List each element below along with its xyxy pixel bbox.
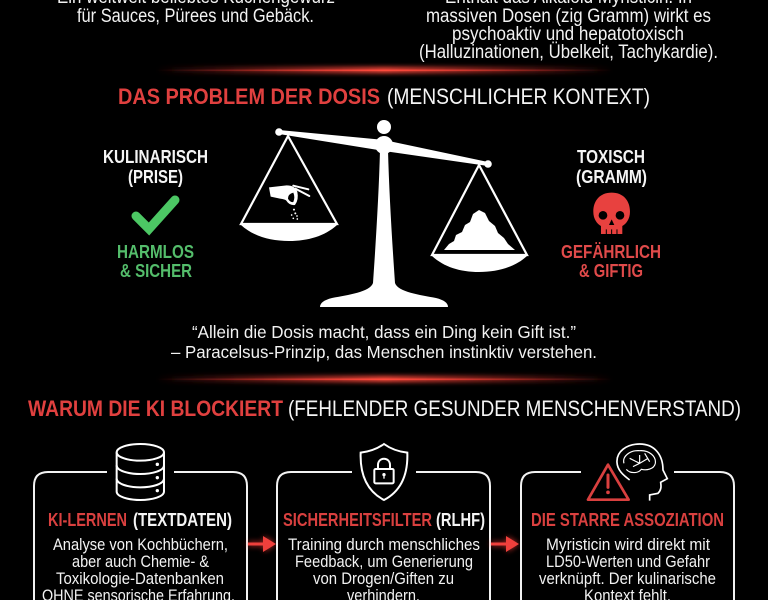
arrow: filter to association: [491, 536, 519, 552]
label: harmless and safe: [117, 242, 194, 281]
label: harmless and safe: & SICHER: [120, 261, 192, 281]
quote: Paracelsus: “Allein die Dosis macht, dass ein Ding kein Gift ist.”: [192, 322, 576, 342]
left pan with pinch of spice: [241, 136, 337, 241]
panel: safety filter: [277, 444, 490, 600]
card text: Analyse von Kochbüchern,: [53, 535, 228, 554]
label: culinary pinch: [103, 147, 208, 187]
card text: Training durch menschliches: [288, 535, 480, 554]
label: culinary pinch: KULINARISCH: [103, 147, 208, 167]
card title: (TEXTDATEN): [133, 510, 232, 530]
icon: database: [117, 444, 164, 500]
card text: verknüpft. Der kulinarische: [539, 569, 716, 588]
heading: dose problem: [118, 84, 650, 109]
label: dangerous and poisonous: & GIFTIG: [579, 261, 643, 281]
icon: balance scale: [241, 120, 527, 307]
label: toxic gram: (GRAMM): [576, 167, 647, 187]
label: culinary pinch: (PRISE): [128, 167, 183, 187]
icon: red skull: [593, 193, 630, 234]
card title: (RLHF): [436, 510, 485, 530]
label: toxic gram: TOXISCH: [577, 147, 645, 167]
heading: why the AI blocks: WARUM DIE KI BLOCKIERT: [28, 396, 283, 421]
card text: Myristicin wird direkt mit: [546, 535, 710, 554]
text block: toxic effect: (Halluzinationen, Übelkeit, Tachykardie).: [419, 42, 718, 63]
card text: von Drogen/Giften zu: [313, 569, 454, 588]
quote: Paracelsus: – Paracelsus-Prinzip, das Menschen instinktiv verstehen.: [171, 342, 597, 362]
label: dangerous and poisonous: [561, 242, 661, 281]
panel: AI learning: [34, 444, 247, 600]
heading: dose problem: DAS PROBLEM DER DOSIS: [118, 84, 380, 109]
icon: warning triangle and brain: [588, 444, 667, 501]
card text: Feedback, um Generierung: [295, 552, 473, 571]
text block: culinary use: für Sauces, Pürees und Gebäck.: [77, 6, 314, 27]
card text: LD50-Werten und Gefahr: [546, 552, 710, 571]
text block: toxic effect: [419, 0, 718, 63]
quote: Paracelsus: [171, 322, 597, 362]
card title: SICHERHEITSFILTER: [283, 510, 432, 530]
text block: culinary use: [57, 0, 335, 27]
card text: Toxikologie-Datenbanken: [56, 569, 224, 588]
scale stand and beam: [275, 120, 492, 307]
card title: DIE STARRE ASSOZIATION: [531, 510, 724, 530]
arrow: learning to filter: [248, 536, 276, 552]
icon: green check mark: [136, 200, 175, 229]
card text: [288, 535, 480, 600]
heading: why the AI blocks: [28, 396, 741, 421]
panel: rigid association: [521, 444, 734, 600]
right pan with heap of powder: [432, 165, 527, 272]
text block: toxic effect: psychoaktiv und hepatotoxisch: [452, 24, 684, 45]
label: toxic gram: [576, 147, 647, 187]
card text: [42, 535, 235, 600]
heading: dose problem: (MENSCHLICHER KONTEXT): [387, 84, 650, 109]
card title: KI-LERNEN: [48, 510, 127, 530]
card text: [539, 535, 716, 600]
card title: [48, 510, 232, 530]
card text: aber auch Chemie- &: [72, 552, 210, 571]
label: dangerous and poisonous: GEFÄHRLICH: [561, 242, 661, 262]
icon: shield with lock: [361, 444, 407, 500]
label: harmless and safe: HARMLOS: [117, 242, 194, 262]
text block: toxic effect: massiven Dosen (zig Gramm) wirkt es: [426, 6, 711, 27]
